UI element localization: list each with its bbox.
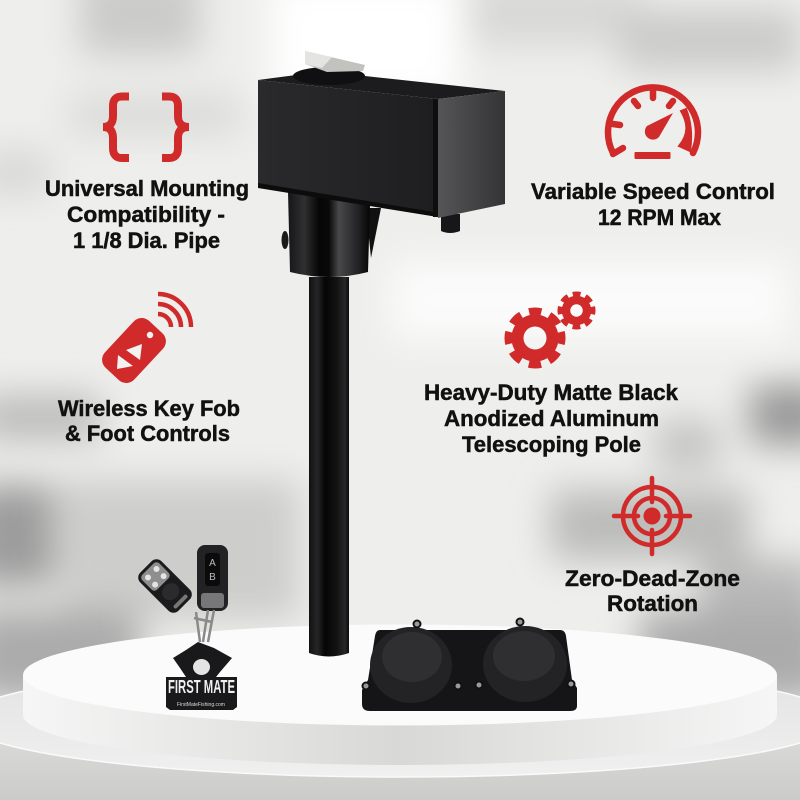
heading: zero dead zone: Zero-Dead-Zone: [565, 566, 740, 591]
pirate tag: FirstMateFishing.com: [177, 702, 225, 708]
large gear: [504, 307, 566, 369]
pole: [309, 277, 349, 656]
key ring: [194, 610, 214, 642]
left tail: [613, 148, 623, 154]
heading: universal mounting: 1 1/8 Dia. Pipe: [73, 228, 220, 253]
back bracket: [366, 208, 381, 258]
upper tier side: [23, 675, 777, 765]
heading: wireless key fob: [58, 396, 240, 446]
foot control pedals: [362, 618, 577, 711]
box bottom edge: [258, 183, 438, 217]
pirate tag: FIRST MATE: [168, 677, 235, 697]
front-side corner: [433, 99, 438, 217]
heading: universal mounting: [45, 176, 249, 253]
speed band: [679, 109, 691, 151]
gauge ticks: [613, 91, 673, 125]
white round platform: [0, 624, 800, 800]
fob: A B: A: [209, 558, 216, 569]
needle: [645, 113, 673, 140]
collar: [288, 192, 370, 277]
heading: wireless key fob: Wireless Key Fob: [58, 396, 240, 421]
lower tier base: [0, 720, 800, 800]
remote body: [98, 313, 170, 388]
lever: [305, 51, 365, 72]
heading: zero dead zone: [565, 566, 740, 616]
upper tier top: [23, 624, 777, 726]
small gear: [557, 291, 596, 330]
heading: wireless key fob: & Foot Controls: [65, 421, 230, 446]
box top: [258, 75, 505, 99]
foot peg: [441, 214, 460, 233]
screws: [362, 618, 574, 690]
heading: zero dead zone: Rotation: [607, 591, 698, 616]
lower tier top: [0, 663, 800, 777]
lever light facet: [305, 51, 332, 68]
heading: heavy-duty: Anodized Aluminum: [444, 406, 659, 431]
heading: variable speed: [531, 179, 775, 230]
key fobs with First Mate tag: [135, 545, 237, 710]
icon: gears: [504, 291, 596, 369]
heading: heavy-duty: [424, 380, 679, 457]
pirate tag: [166, 642, 237, 710]
skull: [193, 659, 210, 675]
box side: [438, 91, 505, 218]
heading: universal mounting: Compatibility -: [67, 202, 225, 227]
gauge arc: [608, 87, 698, 153]
icon: wireless remote: [98, 294, 191, 388]
icon: target: [614, 478, 690, 554]
left pedal: [370, 627, 452, 703]
fob: A B: [197, 545, 228, 611]
base bar: [634, 152, 670, 159]
heading: heavy-duty: Telescoping Pole: [462, 432, 641, 457]
heading: universal mounting: Universal Mounting: [45, 176, 249, 201]
remote button: [147, 332, 153, 338]
fob: four-button: [135, 556, 195, 616]
knob: [293, 67, 365, 85]
remote triangles: [126, 344, 142, 360]
fob: A B: B: [209, 572, 216, 583]
product: telescoping motor unit: [258, 51, 505, 656]
heading: variable speed: 12 RPM Max: [598, 205, 722, 230]
signal waves: [158, 294, 191, 327]
side bump: [282, 231, 288, 249]
box front: [258, 80, 438, 217]
heading: heavy-duty: Heavy-Duty Matte Black: [424, 380, 679, 405]
base plate: [362, 630, 577, 711]
icon: speedometer: [608, 87, 698, 159]
right pedal: [483, 626, 567, 702]
heading: variable speed: Variable Speed Control: [531, 179, 775, 204]
icon: curly braces: [103, 96, 189, 158]
